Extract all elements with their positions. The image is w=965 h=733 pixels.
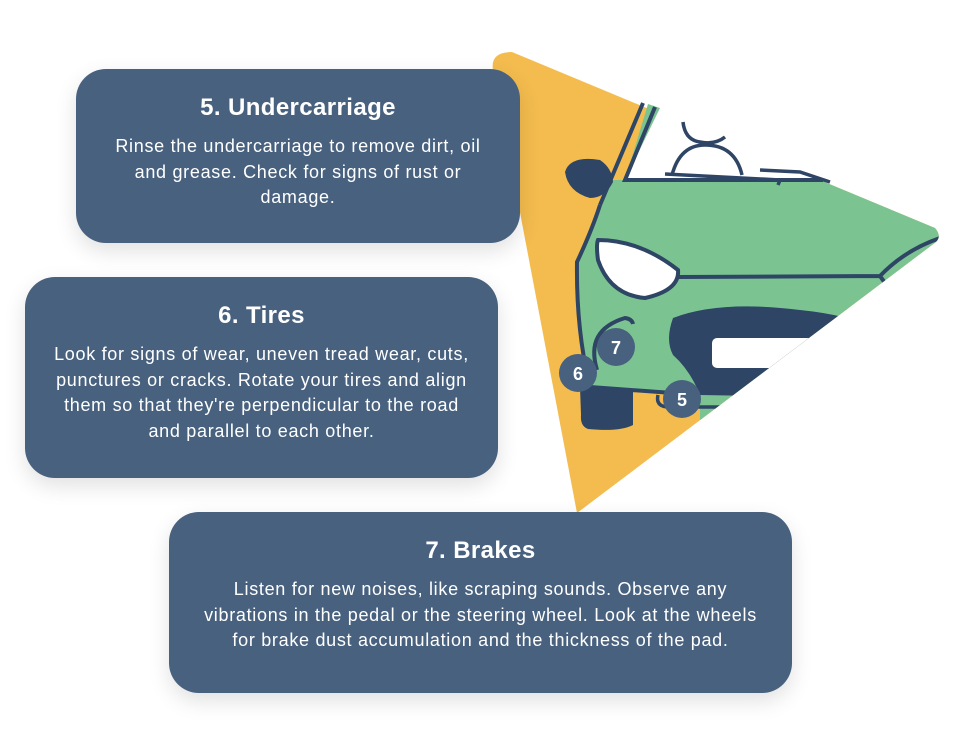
badge 6: 6 <box>573 364 583 384</box>
mirror <box>565 159 613 198</box>
badge 5 <box>663 380 701 418</box>
text block: Listen for new noises, like scraping sounds. Observe any <box>234 579 727 599</box>
badge 7: 7 <box>611 338 621 358</box>
bumper lip <box>656 394 720 409</box>
text block: and grease. Check for signs of rust or <box>135 162 461 182</box>
badge 5: 5 <box>677 390 687 410</box>
hood line <box>679 236 939 282</box>
panel: undercarriage <box>76 69 520 243</box>
heading: 6. Tires <box>218 302 305 329</box>
heading: 5. Undercarriage <box>200 94 396 121</box>
tire <box>580 387 633 430</box>
body outline <box>574 204 665 394</box>
car illustration <box>492 52 939 512</box>
steering wheel <box>665 122 830 185</box>
text block: vibrations in the pedal or the steering wheel. Look at the wheels <box>204 604 757 624</box>
badge 6 <box>559 354 597 392</box>
headlight <box>597 240 678 298</box>
text block <box>54 344 469 441</box>
badge 7 <box>597 328 635 366</box>
heading: 7. Brakes <box>425 537 536 564</box>
text block: and parallel to each other. <box>148 420 375 440</box>
wheel arch <box>594 318 633 370</box>
panel: brakes <box>169 512 792 693</box>
text block <box>204 579 757 650</box>
text block: Rinse the undercarriage to remove dirt, oil <box>115 136 481 156</box>
panel: tires <box>25 277 498 478</box>
car body <box>577 180 960 420</box>
text block: damage. <box>261 187 335 207</box>
text block <box>115 136 481 207</box>
text block: them so that they're perpendicular to the road <box>64 395 459 415</box>
text block: for brake dust accumulation and the thickness of the pad. <box>232 630 729 650</box>
text block: Look for signs of wear, uneven tread wear, cuts, <box>54 344 469 364</box>
yellow triangle background <box>493 52 939 513</box>
text block: punctures or cracks. Rotate your tires and align <box>56 370 467 390</box>
cabin interior (white) <box>625 104 840 180</box>
windshield pillars <box>600 103 823 205</box>
grille <box>669 306 838 396</box>
